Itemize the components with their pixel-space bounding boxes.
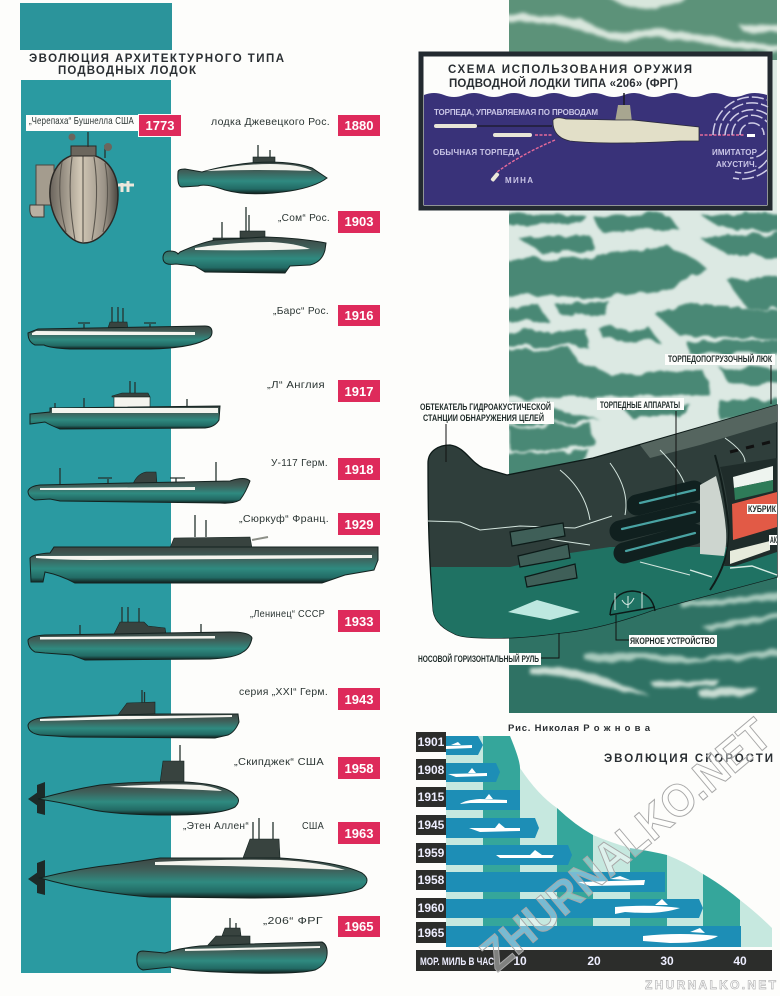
submarine: Surcouf (30, 515, 378, 583)
panel: weapons diagram (421, 54, 770, 208)
bow hull (428, 405, 777, 638)
entry: Bars 1916 (28, 305, 380, 349)
compartment: red crew room (732, 492, 777, 540)
torpedo tubes (620, 490, 695, 553)
label: Ethan Allen: „Этен Аллен“ (183, 820, 249, 832)
label: XXI: серия „XXI“ Герм. (239, 686, 328, 698)
badge: 1933: 1933 (345, 614, 373, 629)
water (424, 93, 767, 205)
diagram title: СХЕМА ИСПОЛЬЗОВАНИЯ ОРУЖИЯ (448, 64, 692, 76)
speed bars (446, 736, 741, 947)
badge: 1903: 1903 (345, 214, 373, 229)
badge: 1773: 1773 (146, 118, 174, 133)
entry: Drzewiecki boat 1880 (178, 115, 380, 194)
entry: Som 1903 (163, 207, 380, 273)
submarine: XXI (28, 690, 239, 738)
label: Skipjack: „Скипджек“ США (234, 756, 324, 768)
badge: 1918 (338, 458, 380, 480)
submarine: Drzewiecki (178, 145, 327, 194)
label: acoustic decoy: ИМИТАТОР (712, 148, 758, 157)
speed chart heading: ЭВОЛЮЦИЯ СКОРОСТИ (604, 753, 773, 765)
badge: 1917 (338, 380, 380, 402)
conventional torpedo (493, 133, 532, 137)
badge: 1916: 1916 (345, 308, 373, 323)
lower hull tint (431, 547, 777, 638)
label: acoustic decoy (712, 148, 758, 169)
year labels: 1901 (418, 735, 445, 749)
illustrator credit: Рис. Николая Р о ж н о в а (508, 723, 651, 734)
callout: sonar fairing: ОБТЕКАТЕЛЬ ГИДРОАКУСТИЧЕСКОЙ (420, 401, 551, 412)
callout: anchor: ЯКОРНОЕ УСТРОЙСТВО (630, 635, 715, 646)
badge: 1929 (338, 513, 380, 535)
submarine: Skipjack (28, 745, 238, 815)
hatch panels (510, 523, 577, 587)
submarine: Type 206 (137, 918, 327, 973)
callout: anchor (629, 635, 717, 647)
compartment: green (734, 480, 773, 500)
submarine: L (30, 381, 220, 429)
bulkhead section (700, 476, 726, 556)
badge: 1903 (338, 211, 380, 233)
torpedo room cutaway bow illustration (428, 405, 777, 638)
anchor gear (610, 591, 655, 615)
foam at cut line (690, 566, 777, 577)
label: U-117: У-117 Герм. (271, 457, 328, 469)
badge: 1918: 1918 (345, 462, 373, 477)
white silhouettes (446, 742, 718, 943)
frame (421, 54, 770, 208)
label: conventional torpedo: ОБЫЧНАЯ ТОРПЕДА (433, 148, 520, 157)
label: Surcouf: „Сюркуф“ Франц. (239, 513, 329, 525)
callout: sonar fairing (418, 401, 554, 424)
badge: 1943: 1943 (345, 692, 373, 707)
stepped area (446, 736, 772, 947)
callout: torpedo tubes (597, 398, 684, 410)
year tags (416, 732, 446, 943)
year labels: 1945 (418, 818, 445, 832)
callouts (416, 353, 775, 665)
entry: Skipjack 1958 (28, 745, 380, 815)
badge: 1963 (338, 822, 380, 844)
water streaks on hull (428, 438, 745, 575)
year labels: 1959 (418, 846, 445, 860)
axis labels: 20 (587, 954, 601, 968)
entry: Leninets 1933 (28, 607, 380, 660)
badge: 1965: 1965 (345, 919, 373, 934)
lower water (509, 578, 777, 713)
compartment: white (733, 466, 773, 488)
label: mine: МИНА (505, 176, 533, 185)
submarine: Som (163, 207, 326, 273)
deck highlight (640, 405, 777, 458)
label: L: „Л“ Англия (267, 379, 325, 391)
title: architecture evolution: ЭВОЛЮЦИЯ АРХИТЕКТУРНОГО ТИПА (29, 53, 284, 65)
label: acoustic decoy: АКУСТИЧ. (716, 160, 757, 169)
upper sea band (500, 0, 780, 60)
badge: 1933 (338, 610, 380, 632)
mine (490, 172, 500, 182)
badge: 1880: 1880 (345, 118, 373, 133)
label: Ethan Allen: США (302, 820, 324, 832)
label text: Turtle: „Черепаха“ Бушнелла США (29, 115, 134, 127)
callout: sonar fairing: СТАНЦИИ ОБНАРУЖЕНИЯ ЦЕЛЕЙ (423, 412, 544, 423)
submarine: Leninets (28, 607, 252, 660)
title: architecture evolution (29, 53, 284, 77)
label: Turtle (26, 115, 139, 131)
axis labels: 10 (513, 954, 527, 968)
badge: 1958 (338, 757, 380, 779)
badge: 1965 (338, 916, 380, 937)
submarine: Bars (28, 307, 212, 349)
badge: 1916 (338, 305, 380, 326)
label: Drzewiecki: лодка Джевецкого Рос. (211, 116, 330, 128)
wire-guided torpedo (434, 124, 552, 128)
second compartment label (769, 535, 777, 545)
cut section line (710, 455, 729, 590)
year labels: 1908 (418, 763, 445, 777)
pink launch lines (497, 135, 745, 172)
label: wire-guided torpedo: ТОРПЕДА, УПРАВЛЯЕМАЯ ПО ПРОВОДАМ (434, 108, 598, 117)
label: Leninets: „Ленинец“ СССР (250, 608, 325, 620)
entry: U-117 1918 (28, 457, 380, 503)
badge: 1773 (138, 114, 182, 137)
sea background illustration (500, 0, 780, 720)
leader lines (446, 364, 771, 658)
badge: 1929: 1929 (345, 517, 373, 532)
year labels: 1915 (418, 790, 445, 804)
title: architecture evolution: ПОДВОДНЫХ ЛОДОК (58, 65, 197, 77)
watermark corner: ZHURNALKO.NET (645, 978, 777, 992)
diagram title (448, 64, 692, 90)
year labels: 1958 (418, 873, 445, 887)
submarine: U-117 (28, 462, 250, 503)
callout: torpedo tubes: ТОРПЕДНЫЕ АППАРАТЫ (600, 400, 680, 410)
entry: L 1917 (30, 379, 380, 429)
axis (416, 950, 772, 971)
submarine: Turtle (30, 132, 134, 243)
year labels: 1965 (418, 926, 445, 940)
axis labels (420, 954, 747, 968)
teal header band (20, 3, 172, 50)
axis labels: 30 (660, 954, 674, 968)
dark swells (500, 214, 780, 480)
callout: bow rudder (416, 653, 541, 665)
badge: 1917: 1917 (345, 384, 373, 399)
section interior (720, 458, 777, 566)
entry: XXI 1943 (28, 686, 380, 738)
entry: Turtle 1773 (26, 114, 182, 243)
bow rudder (508, 600, 580, 620)
badge: 1943 (338, 688, 380, 710)
badge: 1958: 1958 (345, 761, 373, 776)
axis labels: МОР. МИЛЬ В ЧАС (420, 956, 494, 968)
diagram title: ПОДВОДНОЙ ЛОДКИ ТИПА «206» (ФРГ) (449, 77, 678, 90)
year labels (418, 735, 445, 940)
callout: bow rudder: НОСОВОЙ ГОРИЗОНТАЛЬНЫЙ РУЛЬ (418, 653, 539, 664)
label: Bars: „Барс“ Рос. (273, 305, 329, 317)
entry: Surcouf 1929 (30, 513, 380, 583)
chart: speed evolution (416, 732, 772, 971)
label: 206: „206“ ФРГ (263, 915, 323, 927)
teal column behind submarines (21, 80, 171, 973)
acoustic decoy rings (713, 97, 768, 179)
submarine: Ethan Allen (28, 818, 367, 898)
badge: 1963: 1963 (345, 826, 373, 841)
entry: Ethan Allen 1963 (28, 818, 380, 898)
axis labels: 40 (733, 954, 747, 968)
label: Som: „Сом“ Рос. (278, 212, 330, 224)
entry: Type 206 1965 (137, 915, 380, 973)
decoy (747, 134, 755, 137)
badge: 1880 (338, 115, 380, 136)
label: Ethan Allen (183, 820, 324, 832)
year labels: 1960 (418, 901, 445, 915)
windows row (730, 541, 770, 564)
deck slits (730, 442, 770, 452)
submarine 206 silhouette (553, 93, 699, 143)
